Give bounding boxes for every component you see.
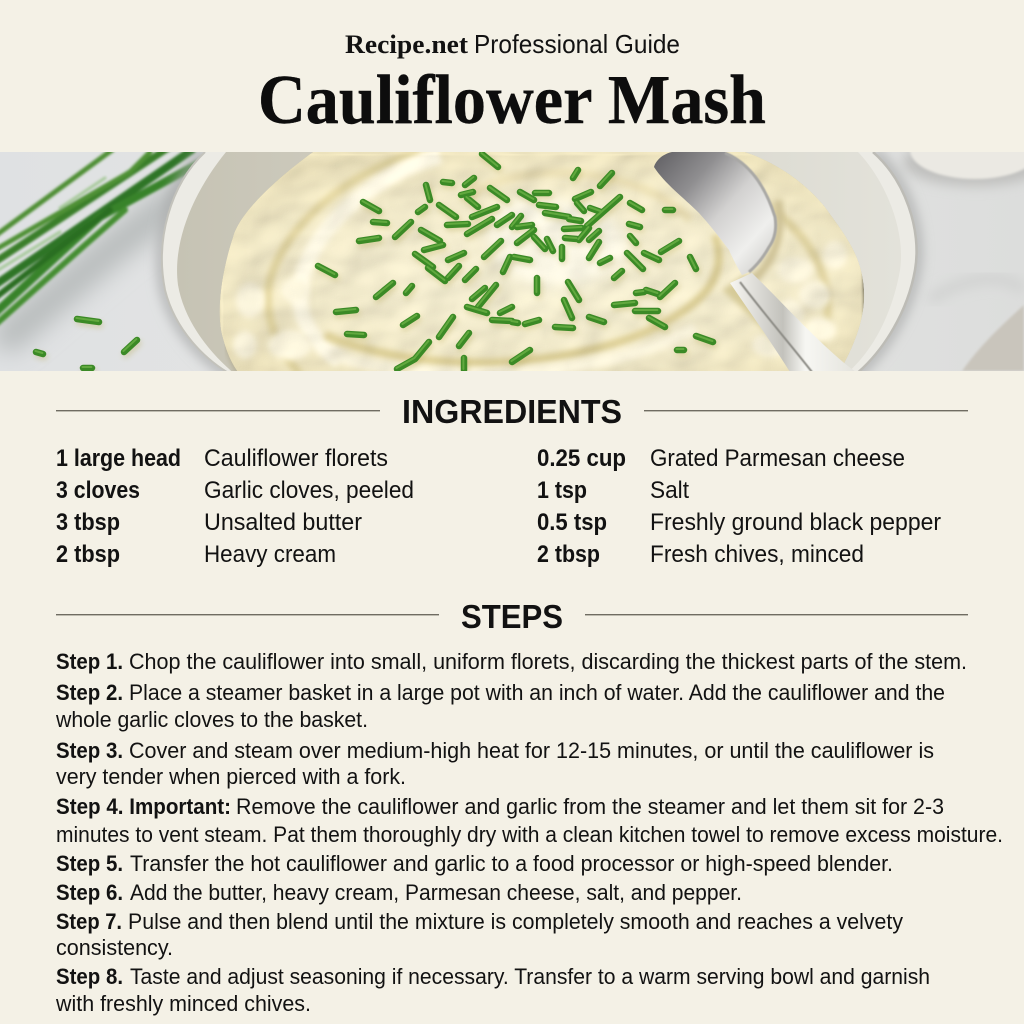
ingredients list: left column: Cauliflower florets [204,445,388,472]
mashed cauliflower [220,152,864,375]
ingredients list: left column [56,445,414,568]
ingredients list: left column: 2 tbsp [56,541,120,568]
step 8: with freshly minced chives. [55,991,311,1016]
ingredients list: right column: 0.5 tsp [537,509,607,536]
ingredients list: right column: Freshly ground black pepper [650,509,941,536]
ingredients list: left column: Heavy cream [204,541,336,568]
icon: linen napkin [962,305,1024,371]
ingredients list: left column: Unsalted butter [204,509,362,536]
step 3: Cover and steam over medium-high heat for 12-15 minutes, or until the cauliflower is [129,738,934,763]
step 8: Taste and adjust seasoning if necessary. Transfer to a warm serving bowl and garnish [130,964,930,989]
step 8: Step 8. [56,964,123,989]
step 3: Step 3. [56,738,123,763]
step 2: Place a steamer basket in a large pot with an inch of water. Add the cauliflower and the [129,680,945,705]
ingredients list: right column: Fresh chives, minced [650,541,864,568]
header: brand line: Professional Guide [474,29,680,59]
step 7: consistency. [56,935,173,960]
hero image: bowl of cauliflower mash [0,152,1024,371]
icon: bunch of fresh chives [0,148,215,335]
step 7: Pulse and then blend until the mixture is completely smooth and reaches a velvety [128,909,904,934]
ingredients list: left column: Garlic cloves, peeled [204,477,414,504]
step 7 [56,909,904,960]
step 5: Step 5. [56,851,123,876]
step 4 [56,794,1003,847]
step 2: whole garlic cloves to the basket. [55,707,368,732]
ingredients list: left column: 1 large head [56,445,181,472]
header: brand line: Recipe.net [345,30,468,59]
chives garnish [35,153,714,373]
step 1: Chop the cauliflower into small, uniform florets, discarding the thickest parts of the stem. [129,649,967,674]
step 8 [55,964,930,1016]
step 1: Step 1. [56,649,123,674]
icon: small bowl in background [900,152,1024,190]
ingredients list: right column: 2 tbsp [537,541,600,568]
section heading: ingredients: INGREDIENTS [402,393,622,430]
step 4: Remove the cauliflower and garlic from the steamer and let them sit for 2-3 [236,794,944,819]
step 7: Step 7. [56,909,122,934]
ingredients list: right column: 1 tsp [537,477,587,504]
step 6: Add the butter, heavy cream, Parmesan cheese, salt, and pepper. [130,880,742,905]
section heading: steps: STEPS [461,598,563,635]
step 2 [55,680,945,732]
header: brand line [345,29,680,59]
ingredients list: right column: Grated Parmesan cheese [650,445,905,472]
title: Cauliflower Mash [258,62,766,139]
bowl [162,152,917,375]
ingredients list: left column: 3 tbsp [56,509,120,536]
ingredients list: right column: 0.25 cup [537,445,626,472]
step 5: Transfer the hot cauliflower and garlic to a food processor or high-speed blender. [130,851,893,876]
step 3 [56,738,934,789]
spoon [654,152,856,372]
step 4: Step 4. Important: [56,794,231,819]
step 6: Step 6. [56,880,123,905]
ingredients list: right column: Salt [650,477,689,504]
step 2: Step 2. [56,680,123,705]
ingredients list: left column: 3 cloves [56,477,140,504]
step 3: very tender when pierced with a fork. [56,764,406,789]
ingredients list: right column [537,445,941,568]
